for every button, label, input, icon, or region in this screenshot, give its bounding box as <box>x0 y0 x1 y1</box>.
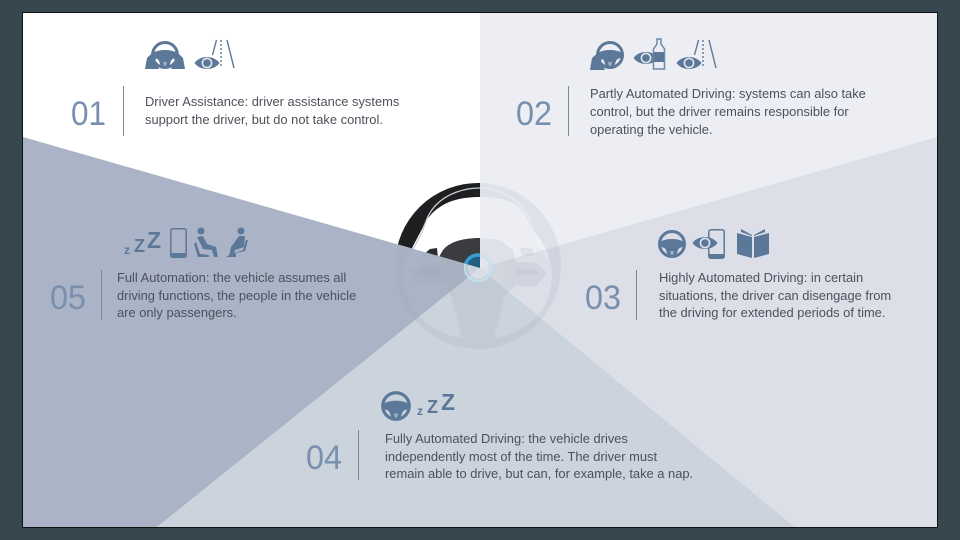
icon: eye on road <box>676 40 716 69</box>
icon: passenger reclined <box>194 228 218 257</box>
steering wheel translucent overlay <box>416 183 561 349</box>
icon: open book <box>737 229 769 258</box>
icon: eye and phone <box>692 230 724 258</box>
icon: phone <box>171 229 186 257</box>
number 01: 01 <box>71 95 106 133</box>
panel 03: highly automated <box>585 229 891 320</box>
text: full automation: driving functions, the people in the vehicle <box>117 288 356 303</box>
text: partly automated driving: control, but the driver remains responsible for <box>590 104 849 119</box>
panel 04 wedge <box>157 268 795 527</box>
icon: sleeping z: Z <box>427 397 438 417</box>
steering wheel hub ring <box>465 255 491 281</box>
text: driver assistance: Driver Assistance: driver assistance systems <box>145 94 399 109</box>
text: fully automated driving: Fully Automated Driving: the vehicle drives <box>385 431 628 446</box>
text: highly automated driving: Highly Automated Driving: in certain <box>659 270 863 285</box>
text: fully automated driving: remain able to drive, but can, for example, take a nap. <box>385 466 693 481</box>
icon: eye and bottle <box>634 39 664 69</box>
number 04: 04 <box>306 439 342 477</box>
steering wheel photo: dark visible half <box>398 183 480 268</box>
panel 03 wedge <box>480 137 937 527</box>
icon: sleeping z <box>417 389 455 418</box>
icon: sleeping z: z <box>124 243 130 257</box>
text: full automation: are only passengers. <box>117 305 237 320</box>
icon: sleeping z <box>124 227 161 257</box>
text: highly automated driving: situations, the driver can disengage from <box>659 288 891 303</box>
panel 01: driver assistance <box>71 40 399 133</box>
text: highly automated driving: the driving for extended periods of time. <box>659 305 885 320</box>
panel 05: full automation <box>50 227 356 320</box>
panel 05 wedge <box>23 137 480 527</box>
icon: hand on wheel <box>590 42 622 70</box>
icon: sleeping z: Z <box>147 227 161 253</box>
icon: wheel <box>383 393 409 419</box>
text: driver assistance: support the driver, but do not take control. <box>145 112 383 127</box>
icon: passenger seated <box>226 228 248 257</box>
panel 04: fully automated <box>306 389 693 481</box>
text: partly automated driving: operating the vehicle. <box>590 122 713 137</box>
panel 02: partly automated <box>516 39 866 137</box>
text: partly automated driving: Partly Automated Driving: systems can also take <box>590 86 866 101</box>
icon: sleeping z: Z <box>134 236 145 256</box>
text: full automation: Full Automation: the vehicle assumes all <box>117 270 346 285</box>
number 05: 05 <box>50 279 86 317</box>
number 02: 02 <box>516 95 552 133</box>
number 03: 03 <box>585 279 621 317</box>
panel 02 wedge <box>480 13 937 268</box>
icon: sleeping z: z <box>417 404 423 418</box>
icon: eye on road <box>194 40 234 69</box>
icon: sleeping z: Z <box>441 389 455 415</box>
icon: wheel <box>660 232 684 256</box>
icon: hands on wheel <box>145 42 185 69</box>
text: fully automated driving: independently most of the time. The driver must <box>385 449 657 464</box>
